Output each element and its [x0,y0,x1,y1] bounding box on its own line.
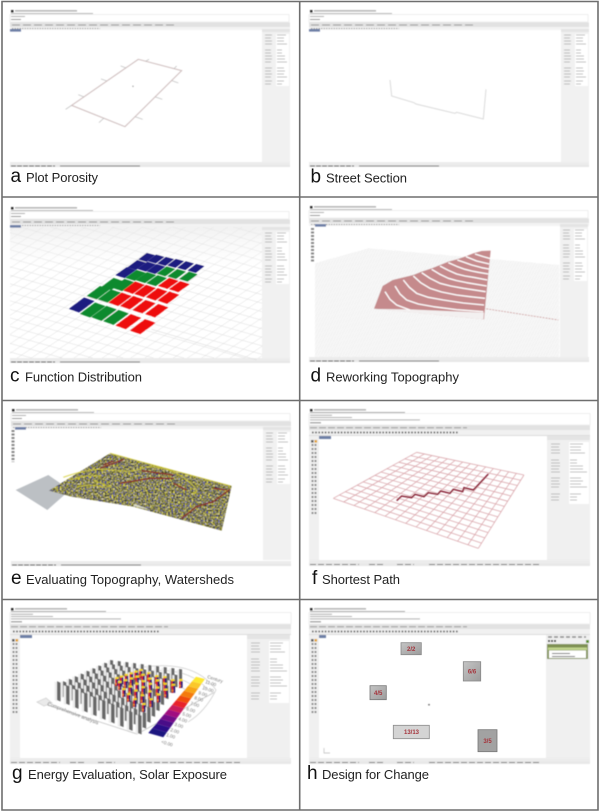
block 13/13: 13/13 [404,730,420,736]
left toolbar d [311,228,314,262]
status bar g [10,758,291,764]
block 2/2 [401,643,421,655]
centre marker [428,704,430,706]
legend labels: 4.00 [178,716,188,724]
properties panel a [262,29,290,162]
window chrome c [10,207,290,227]
left toolbar e [12,430,14,462]
viewport tab b [309,29,320,32]
street section profile [390,80,486,119]
window chrome g [10,608,291,760]
caption g: Energy Evaluation, Solar Exposure [28,767,227,782]
caption a: a [10,166,22,187]
status bar c [10,358,290,363]
block 3/5 [478,730,497,752]
terraced topography [374,251,558,320]
caption e: e [11,568,22,589]
panel: h Design for Change [307,608,590,784]
viewport tab h [319,635,326,638]
solar exposure stacks [115,669,183,712]
legend labels: 1.00 [166,732,176,740]
window chrome h [309,608,590,760]
status bar e [11,561,291,566]
caption a: Plot Porosity [26,170,98,185]
caption d: d [310,366,321,386]
legend labels: 8.00 [194,695,204,703]
watershed terrain [16,453,232,531]
legend labels: 6.00 [186,706,196,714]
caption f: f [312,568,318,589]
block 2/2: 2/2 [407,647,416,653]
properties panel b [561,29,589,162]
properties panel d [560,224,588,357]
street grid and path [333,452,524,548]
window chrome e [11,409,291,429]
legend labels: 3.00 [174,722,184,729]
viewport tab c [10,225,21,228]
viewport tab g [20,635,32,638]
panel: b Street Section [309,10,589,188]
block 6/6: 6/6 [468,670,477,676]
legend labels: 2.00 [170,727,180,735]
viewport tab f [319,436,331,439]
viewport tab a [10,29,21,32]
legend labels: Century [207,674,224,684]
window chrome d [309,206,589,226]
legend labels: 9.00 [198,690,208,698]
status bar a [10,162,290,167]
colour legend [148,677,205,737]
viewport tab d [315,224,326,227]
status bar d [309,357,589,362]
legend labels: 11.00 [205,679,217,688]
caption d: Reworking Topography [326,370,460,384]
status bar f [309,560,590,566]
status bar h [309,758,590,764]
block 13/13 [393,725,429,739]
window chrome f [309,409,590,561]
legend labels: 10.00 [202,685,215,694]
properties panel g [247,635,290,760]
properties panel f [547,436,590,561]
panel: c Function Distribution [10,207,290,386]
viewport grid floor c [10,227,262,358]
properties panel c [262,227,290,360]
legend labels: 5.00 [182,711,192,719]
properties panel h [546,635,590,758]
panel: a Plot Porosity [10,10,290,187]
caption b: Street Section [326,170,407,186]
caption g: g [12,763,23,784]
status bar b [309,162,589,167]
axis icon [324,748,330,753]
panel: d Reworking Topography [309,206,589,386]
caption h: Design for Change [322,767,429,782]
block 6/6 [463,662,481,681]
caption b: b [310,166,321,188]
window chrome a [10,10,290,30]
legend labels: <0.00 [161,739,174,748]
legend labels: 7.00 [190,701,200,708]
viewport tab e [15,427,26,430]
caption c: c [10,366,20,386]
plot outline [66,59,182,127]
block 4/5: 4/5 [374,691,383,697]
caption h: h [307,763,318,784]
caption c: Function Distribution [25,370,142,384]
legend labels [161,674,224,748]
ground plane d [315,248,559,357]
ground plane and sun arcs [37,666,216,734]
panel: e Evaluating Topography, Watersheds [11,409,291,589]
block 3/5: 3/5 [483,739,492,745]
properties panel e [263,427,291,560]
caption f: Shortest Path [322,572,400,587]
panel: g Energy Evaluation, Solar Exposure [10,608,291,784]
caption e: Evaluating Topography, Watersheds [26,572,234,587]
window chrome b [309,10,589,30]
function blocks [69,253,257,360]
plot label: Comprehensive analysis [46,701,100,727]
building walls [55,660,182,736]
panel: f Shortest Path [309,409,590,589]
block 4/5 [370,686,386,700]
